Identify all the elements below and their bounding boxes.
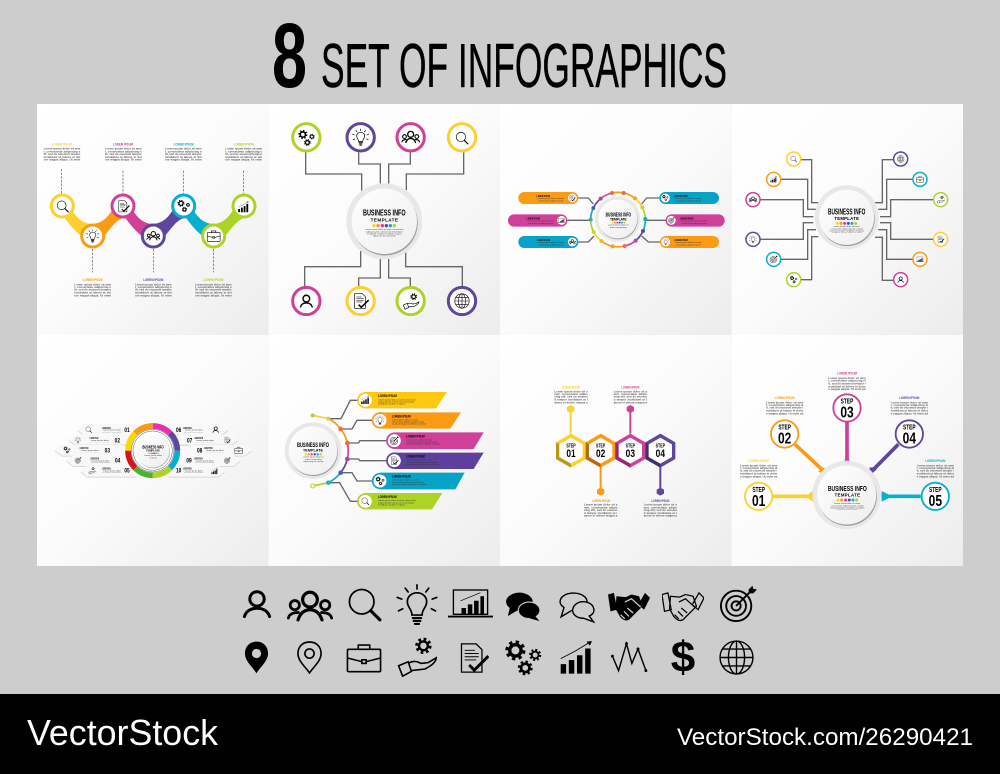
hub heading: BUSINESS INFO <box>828 207 865 216</box>
body text blocks <box>740 377 954 478</box>
node icons <box>57 200 249 242</box>
ribbon text: LOREM IPSUM <box>194 438 203 440</box>
step numbers: STEP <box>596 444 606 450</box>
central disc <box>131 429 174 472</box>
ribbon icons <box>64 427 243 474</box>
connectors <box>328 400 386 501</box>
panel: radial hub with eight large nodes <box>293 124 476 315</box>
bottom row of infographic panels, right pair <box>500 335 963 566</box>
step numbers <box>752 399 942 510</box>
hub heading: TEMPLATE <box>834 216 859 221</box>
ribbon text: LOREM IPSUM <box>183 469 192 471</box>
step labels: LOREM IPSUM <box>775 395 795 400</box>
step numbers <box>566 444 666 460</box>
top row of infographic panels, left pair <box>37 104 500 335</box>
icon: outline handshake <box>662 593 704 621</box>
ribbon text: LOREM IPSUM <box>90 458 99 460</box>
panel: dotted ring with six pills <box>508 191 725 248</box>
outer nodes <box>293 124 476 315</box>
footer bar <box>0 694 1000 774</box>
panel: hub with twelve small nodes <box>746 152 948 287</box>
banners: LOREM IPSUM <box>406 433 425 438</box>
ribbon numbers: 02 <box>115 437 120 444</box>
ribbon numbers: 06 <box>176 427 182 434</box>
bottom row of infographic panels, left pair <box>37 335 500 566</box>
icon: magnifier <box>349 589 380 620</box>
ribbon numbers: 10 <box>176 468 182 475</box>
step numbers: 01 <box>566 448 576 460</box>
icon: hand with gear <box>399 639 436 676</box>
step labels: LOREM IPSUM <box>592 498 610 503</box>
step numbers: STEP <box>903 425 916 432</box>
step labels: LOREM IPSUM <box>651 498 670 503</box>
step numbers: STEP <box>566 444 576 450</box>
step numbers: STEP <box>929 487 942 494</box>
ribbon numbers: 01 <box>124 427 130 434</box>
icon: outline map pin <box>298 642 321 673</box>
connectors <box>567 198 666 242</box>
step labels: LOREM IPSUM <box>203 277 224 282</box>
step labels: LOREM IPSUM <box>83 277 103 282</box>
dashed leaders <box>62 169 244 272</box>
hub heading <box>606 213 631 229</box>
central disc <box>815 185 879 249</box>
hub heading: TEMPLATE <box>146 449 160 453</box>
hub heading: BUSINESS INFO <box>828 484 867 493</box>
panel: ten ribbons around a colour ring <box>54 424 252 478</box>
ribbon numbers: 09 <box>186 458 192 465</box>
step numbers: STEP <box>656 444 665 450</box>
banners: LOREM IPSUM <box>392 474 411 479</box>
ribbon numbers: 08 <box>197 447 203 454</box>
step labels: LOREM IPSUM <box>621 385 640 390</box>
hub heading: BUSINESS INFO <box>363 207 406 217</box>
step labels: LOREM IPSUM <box>234 141 254 146</box>
info pills: LOREM IPSUM <box>674 238 688 242</box>
icon: person <box>244 592 270 617</box>
central disc <box>812 461 881 529</box>
ribbon text: LOREM IPSUM <box>183 428 192 430</box>
icon: target <box>721 586 757 621</box>
info pills: LOREM IPSUM <box>537 194 551 198</box>
step labels <box>749 371 946 463</box>
icon: filled map pin <box>245 642 268 673</box>
step labels <box>52 141 254 282</box>
hexagons <box>556 434 675 468</box>
icon set: two rows of black icons <box>244 585 757 682</box>
step labels: LOREM IPSUM <box>562 385 580 390</box>
wave ribbon <box>64 211 244 237</box>
ribbon numbers <box>105 427 203 475</box>
step labels: LOREM IPSUM <box>837 371 857 376</box>
outer nodes <box>746 152 948 287</box>
step nodes <box>745 394 949 510</box>
panel: wave timeline <box>44 141 262 297</box>
hub heading: BUSINESS INFO <box>142 445 164 450</box>
colour ring <box>128 426 177 475</box>
stems and end markers <box>567 405 664 496</box>
panel: hub with slanted banners <box>285 392 484 509</box>
ribbons <box>54 425 252 478</box>
step numbers: 02 <box>778 431 791 448</box>
top row of infographic panels, right pair <box>500 104 963 335</box>
node icons <box>299 129 469 309</box>
footer bar: VectorStock.com/26290421 <box>677 724 973 751</box>
hub heading <box>828 484 867 510</box>
node icons <box>749 156 945 283</box>
step numbers: STEP <box>778 425 791 432</box>
icon: outline speech bubbles <box>560 593 594 622</box>
hub heading <box>297 442 329 463</box>
banners: LOREM IPSUM <box>392 413 411 418</box>
ribbon numbers: 04 <box>115 458 121 465</box>
title: 8 <box>272 5 307 107</box>
step numbers: 02 <box>596 448 605 460</box>
banners: LOREM IPSUM <box>406 454 425 459</box>
icon: gears <box>507 642 540 674</box>
icon: bar chart <box>561 641 592 674</box>
icon: team <box>288 592 332 620</box>
icon: document with check <box>461 644 488 672</box>
dotted ring <box>589 191 647 248</box>
ribbon text: LOREM IPSUM <box>80 448 88 450</box>
icon: briefcase <box>347 645 381 672</box>
ribbon numbers: 05 <box>124 468 130 475</box>
stems <box>773 422 921 504</box>
info pills: LOREM IPSUM <box>537 238 551 242</box>
body text blocks <box>554 390 677 517</box>
step labels: LOREM IPSUM <box>749 458 769 463</box>
banners <box>358 392 484 509</box>
ribbon numbers: 03 <box>105 447 110 454</box>
icon: filled handshake <box>608 593 650 621</box>
ribbon text: LOREM IPSUM <box>102 469 111 471</box>
step numbers: 03 <box>626 448 635 460</box>
step numbers: 03 <box>840 405 854 422</box>
icon: zigzag line <box>611 642 647 672</box>
info pills: LOREM IPSUM <box>680 217 694 221</box>
hub heading: BUSINESS INFO <box>606 213 631 219</box>
title <box>272 5 727 107</box>
info pills <box>508 192 725 248</box>
step nodes <box>51 195 255 247</box>
central disc <box>595 196 640 242</box>
body text blocks <box>44 147 262 297</box>
ribbon text: LOREM IPSUM <box>204 448 213 450</box>
footer bar: VectorStock <box>27 712 219 753</box>
step labels: LOREM IPSUM <box>143 277 164 282</box>
arc with dots <box>311 413 350 488</box>
step labels: LOREM IPSUM <box>52 141 72 146</box>
step labels: LOREM IPSUM <box>925 458 946 463</box>
info pills: LOREM IPSUM <box>527 217 541 221</box>
step numbers: 04 <box>903 431 916 448</box>
step labels: LOREM IPSUM <box>899 395 920 400</box>
hub heading <box>142 445 164 459</box>
step labels <box>562 385 670 503</box>
hub heading <box>828 207 865 233</box>
central disc <box>285 422 341 479</box>
central disc <box>346 183 422 259</box>
step numbers: 05 <box>929 493 942 510</box>
icon: filled speech bubbles <box>506 593 540 621</box>
step numbers: 04 <box>656 448 666 460</box>
hub heading: TEMPLATE <box>371 217 398 222</box>
hub heading: TEMPLATE <box>303 449 324 453</box>
step labels: LOREM IPSUM <box>113 141 133 146</box>
ribbon text: LOREM IPSUM <box>90 438 98 440</box>
banners: LOREM IPSUM <box>378 393 397 398</box>
hub heading: TEMPLATE <box>610 217 627 221</box>
info pills: LOREM IPSUM <box>674 194 688 198</box>
connectors <box>305 152 464 287</box>
connectors <box>760 160 933 280</box>
ribbon text: LOREM IPSUM <box>102 428 111 430</box>
step labels: LOREM IPSUM <box>174 141 194 146</box>
step numbers: STEP <box>626 444 635 450</box>
ribbon numbers: 07 <box>187 437 193 444</box>
hub heading: TEMPLATE <box>835 493 860 498</box>
banners: LOREM IPSUM <box>378 494 397 499</box>
icon: globe <box>720 641 753 674</box>
hub heading: BUSINESS INFO <box>297 442 329 449</box>
step numbers: 01 <box>752 493 765 510</box>
icon: laptop chart <box>448 590 493 617</box>
ribbon text <box>80 428 225 473</box>
panel: hexagon steps <box>554 385 677 517</box>
hub heading <box>363 207 406 237</box>
icon: light bulb <box>397 585 437 624</box>
panel: hub with five numbered steps <box>740 371 954 529</box>
ribbon text: LOREM IPSUM <box>194 458 203 460</box>
icon: dollar sign: $ <box>671 633 695 682</box>
step numbers: STEP <box>841 399 854 406</box>
step numbers: STEP <box>752 487 765 494</box>
